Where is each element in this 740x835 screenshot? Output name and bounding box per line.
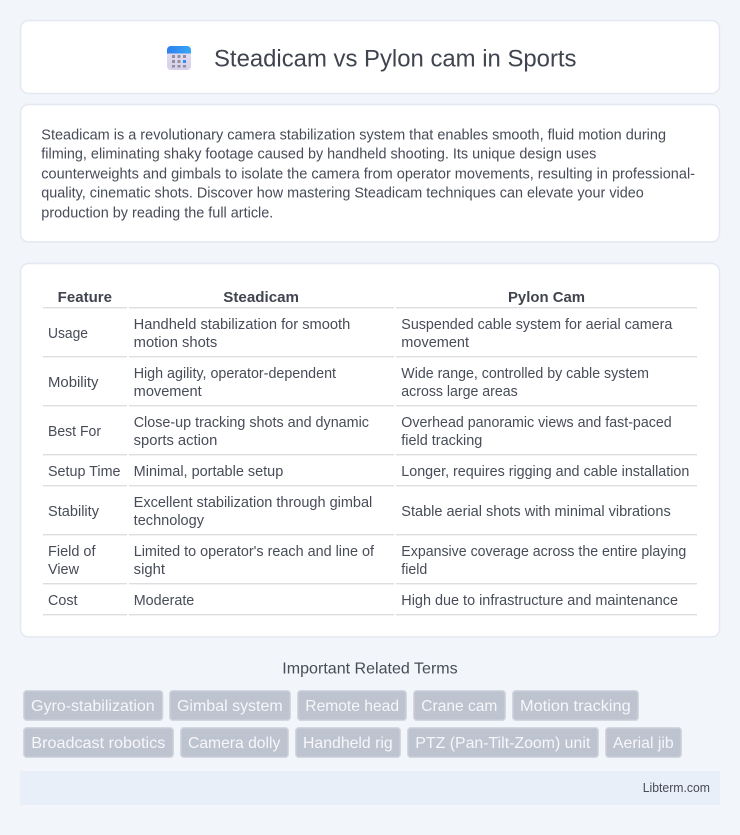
chip: broadcast robotics: Broadcast robotics	[31, 735, 165, 752]
row: usage: movement	[401, 335, 469, 351]
footer bar	[20, 771, 720, 805]
chip: crane cam: Crane cam	[421, 698, 497, 715]
footer credit: Libterm.com	[643, 780, 710, 795]
row: best for	[48, 415, 672, 449]
row: cost: High due to infrastructure and maintenance	[401, 593, 678, 609]
table header	[58, 289, 585, 306]
title: Steadicam vs Pylon cam in Sports	[214, 46, 576, 73]
row: cost: Cost	[48, 593, 78, 609]
row: mobility: High agility, operator-dependent	[134, 366, 336, 382]
chip: camera dolly	[181, 728, 288, 757]
row: stability: technology	[134, 513, 205, 529]
row: field of view: sight	[134, 562, 165, 578]
chip: gyro-stabilization: Gyro-stabilization	[31, 698, 155, 715]
row: cost: Moderate	[134, 593, 194, 609]
row: mobility: Wide range, controlled by cable system	[401, 366, 649, 382]
row: stability	[48, 495, 671, 529]
row: best for: sports action	[134, 433, 217, 449]
row: field of view	[48, 544, 686, 578]
row: field of view: View	[48, 562, 80, 578]
row: stability: Excellent stabilization through gimbal	[134, 495, 372, 511]
intro paragraph	[41, 127, 695, 221]
intro paragraph: counterweights and gimbals to isolate the camera from operator movements, resulting in professional-	[41, 166, 695, 182]
row: stability: Stable aerial shots with minimal vibrations	[401, 504, 671, 520]
chip: handheld rig	[296, 728, 400, 757]
chip: camera dolly: Camera dolly	[188, 735, 280, 752]
related terms chips	[24, 691, 681, 757]
row: usage	[48, 317, 672, 351]
chip: gyro-stabilization	[24, 691, 163, 720]
chip: aerial jib	[606, 728, 681, 757]
chip: motion tracking: Motion tracking	[520, 698, 631, 715]
row: usage: motion shots	[134, 335, 217, 351]
row: setup time: Minimal, portable setup	[134, 464, 283, 480]
intro paragraph: filming, eliminating shaky footage caused by handheld shooting. Its unique design uses	[41, 147, 596, 163]
chip: remote head	[298, 691, 406, 720]
row: field of view: Limited to operator's reach and line of	[134, 544, 375, 560]
table header: Steadicam	[223, 289, 299, 306]
panel: introduction	[20, 104, 720, 242]
row: best for: Best For	[48, 424, 101, 440]
table header: Pylon Cam	[508, 289, 585, 306]
row: mobility: Mobility	[48, 375, 99, 391]
row: setup time: Longer, requires rigging and cable installation	[401, 464, 689, 480]
row: usage: Usage	[48, 326, 88, 342]
row: usage: Handheld stabilization for smooth	[134, 317, 350, 333]
chip: ptz unit	[408, 728, 598, 757]
icon: calendar	[167, 46, 191, 70]
row: usage: Suspended cable system for aerial camera	[401, 317, 672, 333]
row: mobility	[48, 366, 649, 400]
row: best for: field tracking	[401, 433, 482, 449]
chip: gimbal system	[170, 691, 290, 720]
chip: gimbal system: Gimbal system	[177, 698, 283, 715]
row: best for: Close-up tracking shots and dynamic	[134, 415, 369, 431]
chip: handheld rig: Handheld rig	[303, 735, 393, 752]
header panel	[20, 20, 720, 94]
heading: important related terms: Important Related Terms	[282, 660, 458, 677]
intro paragraph: quality, cinematic shots. Discover how mastering Steadicam techniques can elevate your video	[41, 186, 644, 202]
panel: comparison table	[20, 264, 720, 637]
row: setup time	[48, 464, 689, 480]
row: field of view: Field of	[48, 544, 96, 560]
row: best for: Overhead panoramic views and fast-paced	[401, 415, 672, 431]
row: stability: Stability	[48, 504, 100, 520]
row: mobility: movement	[134, 384, 202, 400]
intro paragraph: production by reading the full article.	[41, 205, 273, 221]
intro paragraph: Steadicam is a revolutionary camera stabilization system that enables smooth, fluid motion during	[41, 127, 666, 143]
row: cost	[48, 593, 678, 609]
chip: broadcast robotics	[24, 728, 173, 757]
chip: remote head: Remote head	[305, 698, 399, 715]
chip: aerial jib: Aerial jib	[613, 735, 674, 752]
row: field of view: Expansive coverage across the entire playing	[401, 544, 686, 560]
table header: Feature	[58, 289, 112, 306]
row: field of view: field	[401, 562, 427, 578]
chip: crane cam	[414, 691, 505, 720]
row: mobility: across large areas	[401, 384, 518, 400]
row: setup time: Setup Time	[48, 464, 120, 480]
chip: motion tracking	[513, 691, 638, 720]
chip: ptz unit: PTZ (Pan-Tilt-Zoom) unit	[415, 735, 591, 752]
